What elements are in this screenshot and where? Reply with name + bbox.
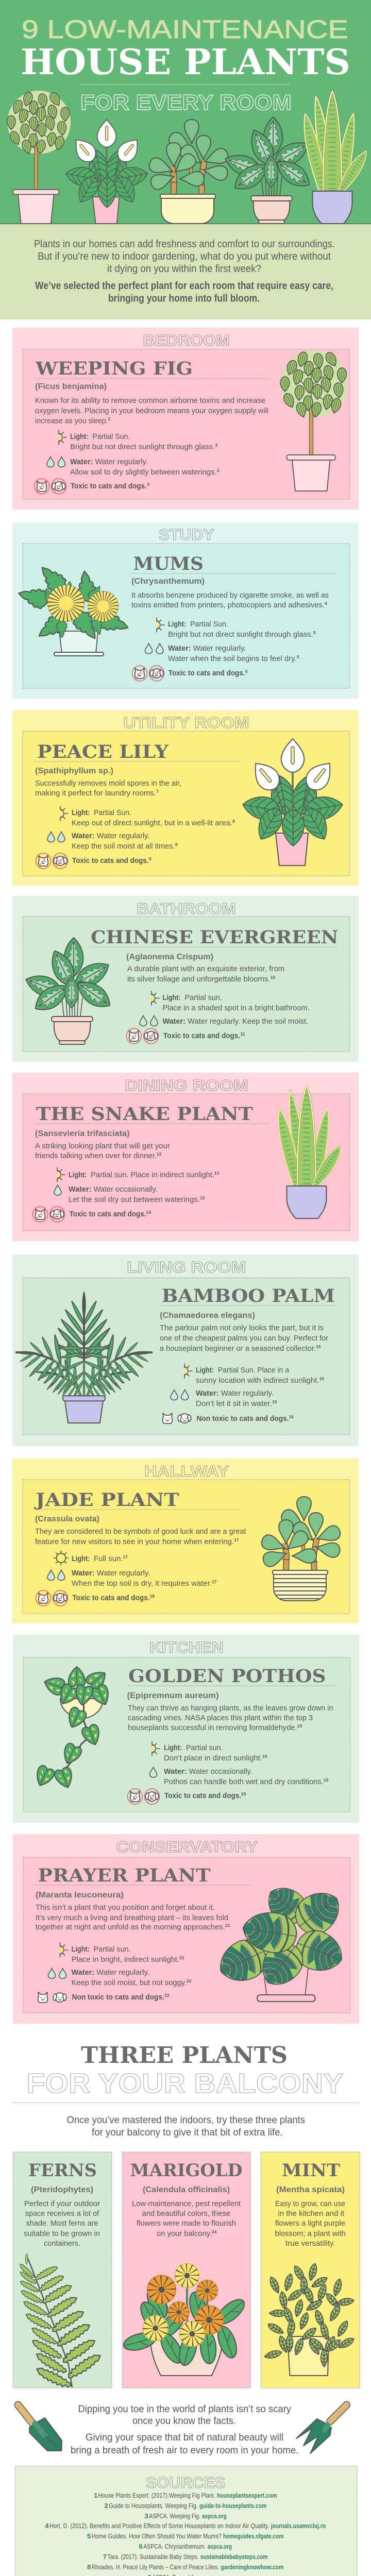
- description: It’s very much a living and breathing plant – its leaves fold: [36, 1914, 228, 1922]
- light text: Partial sun.: [94, 1945, 131, 1954]
- toxicity text: Toxic to cats and dogs.: [72, 857, 148, 865]
- plant name: JADE PLANT: [34, 1489, 179, 1511]
- toxicity text: Toxic to cats and dogs.: [164, 1792, 241, 1800]
- light text: sunny location with indirect sunlight.: [196, 1377, 319, 1385]
- plant name: WEEPING FIG: [35, 358, 193, 379]
- water text: Water:: [70, 458, 93, 466]
- plant: mint: [264, 2263, 356, 2376]
- description: 10: [271, 975, 275, 980]
- water text: Allow soil to dry slightly between waterings.: [70, 468, 216, 477]
- source list: House Plants Expert. (2017).Weeping Fig Plant.: [98, 2492, 215, 2499]
- light text: [196, 1366, 324, 1385]
- icon: light: [157, 618, 164, 632]
- light text: [168, 620, 316, 639]
- source list: 5: [87, 2532, 91, 2540]
- description: [35, 779, 181, 798]
- plant name: PRAYER PLANT: [38, 1865, 210, 1886]
- source list: Hort, D. (2012). Benefits and Positive Effects of Some Houseplants on Indoor Air Quality.: [49, 2522, 269, 2530]
- water text: Water:: [72, 1969, 94, 1977]
- room heading: BATHROOM: [137, 900, 236, 918]
- light text: Place in a shaded spot in a bright bathroom.: [163, 1004, 309, 1012]
- room heading: KITCHEN: [149, 1639, 224, 1656]
- description: true versatility.: [285, 2240, 335, 2248]
- intro panel: it dying on you within the first week?: [107, 263, 261, 275]
- description: [35, 397, 268, 426]
- panel: bedroom: [12, 328, 359, 510]
- latin name: (Epipremnum aureum): [127, 1691, 218, 1700]
- panel: bathroom: [12, 896, 359, 1062]
- description: 24: [212, 2229, 217, 2234]
- title line two: HOUSE PLANTS: [21, 42, 350, 83]
- intro panel: But if you’re new to indoor gardening, what do you put where without: [38, 251, 331, 262]
- balcony heading: THREE PLANTS: [81, 2042, 288, 2069]
- light text: 2: [215, 443, 217, 448]
- latin name: (Chamaedorea elegans): [160, 1311, 255, 1320]
- panel: kitchen: [13, 1635, 359, 1823]
- water text: Water:: [164, 1768, 187, 1776]
- water text: Water:: [163, 1018, 185, 1026]
- icon: water: [47, 456, 65, 467]
- room heading: LIVING ROOM: [127, 1259, 246, 1276]
- closing text: [71, 2403, 298, 2456]
- water text: [196, 1389, 277, 1408]
- plant name: FERNS: [28, 2160, 97, 2181]
- source list: sustainablebabysteps.com: [200, 2553, 268, 2561]
- panel: hallway: [12, 1459, 359, 1623]
- description: containers.: [44, 2240, 80, 2248]
- icon: non-toxic pets: [38, 1992, 66, 2003]
- light text: 19: [262, 1754, 267, 1759]
- description: They are considered to be symbols of good luck and are a great: [35, 1528, 246, 1536]
- light text: 17: [123, 1554, 128, 1560]
- source list: aspca.org: [208, 2543, 232, 2550]
- water text: 8: [175, 842, 178, 847]
- water text: 22: [187, 1978, 192, 1984]
- description: blossom; a plant with: [275, 2230, 346, 2238]
- light text: Light:: [72, 1945, 90, 1954]
- source list: houseplantsexpert.com: [217, 2492, 277, 2499]
- source list: homeguides.sfgate.com: [223, 2532, 283, 2540]
- water text: Water:: [168, 645, 191, 653]
- icon: toxic to pets: [132, 666, 164, 681]
- water text: [70, 458, 220, 477]
- latin name: (Maranta leuconeura): [36, 1891, 124, 1900]
- intro panel: [0, 224, 371, 319]
- water text: 19: [324, 1777, 329, 1783]
- panel: dining room: [12, 1073, 359, 1241]
- description: Perfect if your outdoor: [24, 2200, 100, 2208]
- plant illustration: [23, 938, 115, 1044]
- description: [160, 1324, 328, 1353]
- icon: light: [151, 991, 159, 1006]
- plant name: MINT: [282, 2160, 340, 2181]
- plant: mums: [16, 561, 131, 656]
- source list: ASPCA. Chrysanthemum.: [143, 2543, 206, 2550]
- description: 4: [325, 601, 327, 606]
- water text: Water regularly.: [97, 1569, 150, 1578]
- light text: [72, 1945, 184, 1964]
- description: [132, 2200, 241, 2238]
- water text: [168, 645, 299, 663]
- room heading: HALLWAY: [144, 1463, 229, 1480]
- balcony subheading: FOR YOUR BALCONY: [26, 2068, 343, 2099]
- description: 15: [316, 1344, 321, 1349]
- plant: fig: [7, 91, 71, 224]
- room heading: UTILITY ROOM: [123, 714, 249, 732]
- light text: 13: [214, 1171, 219, 1176]
- toxicity text: Non toxic to cats and dogs.: [72, 1993, 164, 2002]
- sources heading: SOURCES: [146, 2474, 226, 2492]
- source list: 3: [144, 2512, 148, 2520]
- water text: Pothos can handle both wet and dry conditions.: [164, 1778, 324, 1786]
- light text: [72, 1554, 128, 1563]
- balcony intro: [67, 2115, 305, 2138]
- icon: water: [47, 832, 65, 842]
- water text: Water:: [69, 1185, 92, 1194]
- description: [275, 2200, 346, 2248]
- water text: Water:: [196, 1389, 218, 1398]
- source list: Home Guides. How Often Should You Water Mums?: [92, 2532, 222, 2540]
- closing text: bring a breath of fresh air to every room in your home.: [71, 2445, 298, 2456]
- water text: Water:: [72, 1569, 95, 1578]
- light text: Partial sun. Place in indirect sunlight.: [91, 1171, 214, 1179]
- source list: Rhoades, H. Peace Lily Plants – Care of Peace Lilies.: [92, 2563, 219, 2571]
- plant illustration: [278, 1086, 341, 1218]
- water text: Water regularly.: [95, 458, 148, 466]
- description: [24, 2200, 100, 2248]
- description: a houseplant beginner or a seasoned collector.: [160, 1345, 316, 1353]
- plant name: MARIGOLD: [130, 2160, 242, 2181]
- plant name: CHINESE EVERGREEN: [91, 927, 338, 948]
- description: oxygen levels. Placing in your bedroom means your oxygen supply will: [35, 407, 268, 415]
- icon: full sun: [54, 1551, 68, 1565]
- water text: Water regularly.: [221, 1389, 274, 1398]
- description: houseplants successful in removing formaldehyde.: [128, 1724, 297, 1732]
- plant name: PEACE LILY: [37, 741, 169, 762]
- source list: 4: [45, 2522, 49, 2530]
- light text: Light:: [72, 1555, 90, 1563]
- closing text: once you know the facts.: [132, 2415, 236, 2427]
- light text: Keep out of direct sunlight, but in a well-lit area.: [72, 819, 232, 827]
- source list: 1: [94, 2492, 98, 2499]
- toxicity text: Toxic to cats and dogs.: [69, 1210, 146, 1218]
- light text: Partial sun.: [184, 994, 222, 1002]
- light text: Partial sun.: [186, 1744, 223, 1752]
- water text: Water:: [72, 832, 95, 840]
- icon: non-toxic pets: [163, 1413, 191, 1423]
- source list: 6: [139, 2543, 143, 2550]
- light text: Partial Sun. Place in a: [218, 1366, 290, 1375]
- description: [35, 1142, 170, 1160]
- water text: Don’t let it sit in water.: [196, 1400, 272, 1408]
- description: [128, 1704, 333, 1732]
- icon: water: [54, 1185, 61, 1195]
- description: increase as you sleep.: [35, 417, 108, 426]
- water text: [72, 1969, 192, 1987]
- plant: jade: [147, 120, 230, 224]
- intro text: Plants in our homes can add freshness and comfort to our surroundings.: [34, 239, 335, 250]
- source list: [32, 2492, 338, 2576]
- description: on your balcony.: [157, 2230, 212, 2238]
- panel: living room: [12, 1255, 359, 1446]
- plant: peace lily: [64, 120, 149, 224]
- description: feature for new visitors to see in your home when entering.: [35, 1538, 234, 1546]
- water text: When the top soil is dry, it requires water.: [72, 1580, 212, 1588]
- water text: Water regularly.: [97, 832, 150, 840]
- icon: light: [60, 1943, 68, 1957]
- room heading: BEDROOM: [143, 332, 230, 349]
- icon: water: [47, 1570, 65, 1581]
- plant name: BAMBOO PALM: [162, 1285, 335, 1307]
- room heading: STUDY: [159, 526, 214, 544]
- water text: Let the soil dry out between waterings.: [69, 1196, 200, 1204]
- light text: Full sun.: [94, 1555, 123, 1563]
- toxicity text: 14: [146, 1210, 151, 1215]
- light text: Don’t place in direct sunlight.: [164, 1754, 262, 1762]
- description: 1: [108, 416, 110, 421]
- plant name: THE SNAKE PLANT: [36, 1104, 253, 1125]
- light text: [70, 433, 217, 451]
- panel: utility room: [12, 710, 359, 886]
- water text: 17: [212, 1579, 217, 1584]
- plant: snake plant: [304, 91, 366, 224]
- panel: study: [12, 522, 359, 699]
- description: 12: [157, 1151, 162, 1157]
- light text: [72, 809, 235, 827]
- plant name: GOLDEN POTHOS: [128, 1666, 326, 1687]
- icon: water: [140, 1016, 158, 1026]
- description: [36, 1904, 230, 1931]
- description: Known for its ability to remove common airborne toxins and increase: [35, 397, 265, 405]
- latin name: (Mentha spicata): [276, 2185, 345, 2194]
- light text: Light:: [168, 620, 186, 629]
- description: [35, 1528, 246, 1546]
- description: flowers were made to flourish: [137, 2219, 236, 2228]
- toxicity text: Toxic to cats and dogs.: [163, 1032, 240, 1040]
- description: A durable plant with an exquisite exterior, from: [127, 965, 284, 973]
- water text: 2: [217, 468, 220, 473]
- light text: [163, 994, 309, 1012]
- panel: ferns: [13, 2152, 112, 2391]
- light text: [164, 1744, 267, 1762]
- description: 21: [225, 1923, 230, 1928]
- icon: light: [152, 1741, 160, 1756]
- panel: marigold: [122, 2152, 250, 2388]
- icon: toxic to pets: [33, 1207, 65, 1222]
- description: shade. Most ferns are: [26, 2219, 98, 2228]
- source list: 8: [87, 2563, 91, 2571]
- icon: toxic to pets: [36, 853, 68, 869]
- icon: light: [57, 1167, 65, 1182]
- light text: Light:: [163, 994, 181, 1002]
- plant: bamboo palm: [15, 1292, 153, 1423]
- toxicity text: 16: [289, 1414, 294, 1419]
- balcony intro: Once you’ve mastered the indoors, try these three plants: [67, 2115, 305, 2126]
- source list: aspca.org: [202, 2512, 227, 2520]
- source list: 7: [103, 2553, 107, 2561]
- water text: [69, 1185, 205, 1204]
- light text: Bright but not direct sunlight through glass.: [168, 631, 313, 639]
- plant name: MUMS: [133, 553, 204, 574]
- plant illustration: [260, 1497, 342, 1601]
- description: suitable to be grown in: [24, 2230, 100, 2238]
- toxicity text: 11: [240, 1031, 245, 1037]
- description: one of the cheapest palms you can buy. Perfect for: [160, 1334, 328, 1343]
- description: Successfully removes mold spores in the air,: [35, 779, 181, 788]
- water text: [72, 1569, 217, 1588]
- latin name: (Aglaonema Crispum): [126, 953, 213, 961]
- icon: light: [59, 430, 66, 445]
- toxicity text: Toxic to cats and dogs.: [71, 482, 147, 490]
- plant: chinese evergreen: [222, 117, 315, 224]
- light text: 22: [179, 1955, 184, 1960]
- light text: Partial Sun.: [94, 809, 131, 817]
- icon: garden fork: [296, 2405, 347, 2453]
- description: cascading vines. NASA places this plant within the top 3: [128, 1714, 313, 1722]
- icon: toxic to pets: [127, 1028, 159, 1044]
- latin name: (Spathiphyllum sp.): [35, 767, 113, 775]
- latin name: (Pteridophytes): [31, 2185, 93, 2194]
- source list: ASPCA. Weeping Fig.: [149, 2512, 200, 2520]
- water text: 5: [297, 654, 299, 659]
- icon: light: [60, 806, 68, 821]
- icon: water: [149, 1767, 157, 1777]
- plant illustration: [280, 350, 348, 491]
- plant: fern: [18, 2253, 103, 2391]
- description: A striking looking plant that will get your: [35, 1142, 170, 1150]
- plant illustration: [241, 739, 344, 866]
- intro panel: bringing your home into full bloom.: [108, 293, 260, 304]
- panel: mint: [261, 2152, 360, 2388]
- description: its silver foliage and unforgettable blooms.: [127, 975, 271, 984]
- light text: Light:: [72, 809, 90, 817]
- light text: 15: [319, 1376, 324, 1381]
- description: Easy to grow, can use: [275, 2200, 345, 2208]
- light text: Partial Sun.: [92, 433, 130, 441]
- source list: Tara. (2017). Sustainable Baby Steps.: [107, 2553, 199, 2561]
- toxicity text: 23: [164, 1993, 170, 1998]
- latin name: (Crassula ovata): [35, 1515, 99, 1523]
- water text: Water regularly.: [193, 645, 246, 653]
- light text: 5: [313, 630, 316, 635]
- icon: toxic to pets: [34, 479, 66, 494]
- room heading: DINING ROOM: [125, 1077, 248, 1094]
- description: and beautiful colors, these: [142, 2210, 230, 2218]
- source list: Guide to Houseplants. Weeping Fig.: [109, 2502, 198, 2510]
- latin name: (Ficus benjamina): [35, 382, 107, 391]
- closing text: Dipping you toe in the world of plants isn’t so scary: [78, 2403, 291, 2415]
- description: space receives a lot of: [25, 2210, 99, 2218]
- light text: Light:: [69, 1171, 87, 1179]
- water text: Water occasionally.: [189, 1768, 252, 1776]
- source list: guide-to-houseplants.com: [199, 2502, 266, 2510]
- toxicity text: 20: [241, 1791, 246, 1797]
- latin name: (Sansevieria trifasciata): [35, 1129, 130, 1138]
- balcony heading: [26, 2042, 343, 2099]
- description: Low-maintenance, pest repellent: [132, 2200, 241, 2208]
- water text: [72, 832, 178, 851]
- source list: journals.usamvcluj.ro: [271, 2522, 326, 2530]
- description: in the kitchen and it: [278, 2210, 344, 2218]
- toxicity text: Toxic to cats and dogs.: [168, 669, 245, 677]
- light text: Light:: [164, 1744, 182, 1752]
- description: flowers a light purple: [275, 2219, 345, 2228]
- description: toxins emitted from printers, photocopiers and adhesives.: [131, 601, 325, 609]
- description: 19: [297, 1723, 302, 1728]
- description: It absorbs benzene produced by cigarette smoke, as well as: [131, 591, 329, 600]
- water text: Water regularly. Keep the soil moist.: [188, 1018, 308, 1026]
- water text: Water occasionally.: [94, 1185, 158, 1194]
- description: 7: [156, 789, 159, 794]
- light text: Partial Sun.: [190, 620, 228, 629]
- balcony intro: for your balcony to give it that bit of extra life.: [92, 2127, 283, 2138]
- water text: Water when the soil begins to feel dry.: [168, 655, 297, 663]
- plant: golden pothos: [32, 1667, 113, 1790]
- water text: 13: [200, 1195, 205, 1200]
- toxicity text: Non toxic to cats and dogs.: [197, 1415, 289, 1423]
- plant: marigold: [122, 2263, 248, 2376]
- icon: water: [48, 1968, 66, 1978]
- toxicity text: 3: [147, 482, 149, 487]
- water text: [164, 1768, 329, 1786]
- water text: Keep the soil moist at all times.: [72, 842, 175, 851]
- light text: Place in bright, indirect sunlight.: [72, 1956, 179, 1964]
- description: friends talking when over for dinner.: [35, 1152, 157, 1160]
- toxicity text: 6: [245, 669, 248, 674]
- latin name: (Calendula officinalis): [143, 2185, 230, 2194]
- header panel: [0, 0, 371, 224]
- icon: toxic to pets: [128, 1789, 160, 1804]
- icon: toxic to pets: [36, 1590, 68, 1606]
- plant: prayer plant: [174, 1849, 371, 2030]
- description: 17: [234, 1537, 239, 1543]
- description: The parlour palm not only looks the part, but it is: [160, 1324, 324, 1332]
- icon: light: [184, 1364, 192, 1378]
- description: making it perfect for laundry rooms.: [35, 789, 156, 798]
- title line three: FOR EVERY ROOM: [80, 90, 292, 114]
- title line one: 9 LOW-MAINTENANCE: [22, 15, 348, 44]
- closing text: Giving your space that bit of natural beauty will: [86, 2432, 283, 2443]
- panel: sources: [15, 2466, 357, 2576]
- water text: Water regularly.: [96, 1969, 149, 1977]
- light text: 8: [232, 819, 235, 824]
- icon: water: [171, 1390, 189, 1400]
- source list: 2: [104, 2502, 108, 2510]
- description: They can thrive as hanging plants, as the leaves grow down in: [128, 1704, 333, 1713]
- water text: 15: [272, 1399, 277, 1404]
- source list: gardeningknowhow.com: [221, 2563, 283, 2571]
- light text: Light:: [70, 433, 88, 441]
- latin name: (Chrysanthemum): [131, 577, 205, 586]
- water text: Keep the soil moist, but not soggy.: [72, 1979, 187, 1987]
- room heading: CONSERVATORY: [116, 1838, 258, 1856]
- description: [127, 965, 284, 984]
- description: [131, 591, 329, 609]
- toxicity text: Toxic to cats and dogs.: [72, 1594, 149, 1602]
- toxicity text: 18: [149, 1594, 155, 1599]
- toxicity text: 9: [149, 856, 151, 861]
- light text: Light:: [196, 1366, 214, 1375]
- description: together at night and unfold as the morning approaches.: [36, 1923, 225, 1931]
- icon: water: [145, 643, 163, 654]
- icon: trowel: [18, 2405, 62, 2451]
- intro panel: We’ve selected the perfect plant for each room that require easy care,: [35, 280, 333, 292]
- light text: Bright but not direct sunlight through glass.: [70, 443, 215, 451]
- description: This isn’t a plant that you position and forget about it.: [36, 1904, 215, 1912]
- panel: conservatory: [13, 1834, 371, 2030]
